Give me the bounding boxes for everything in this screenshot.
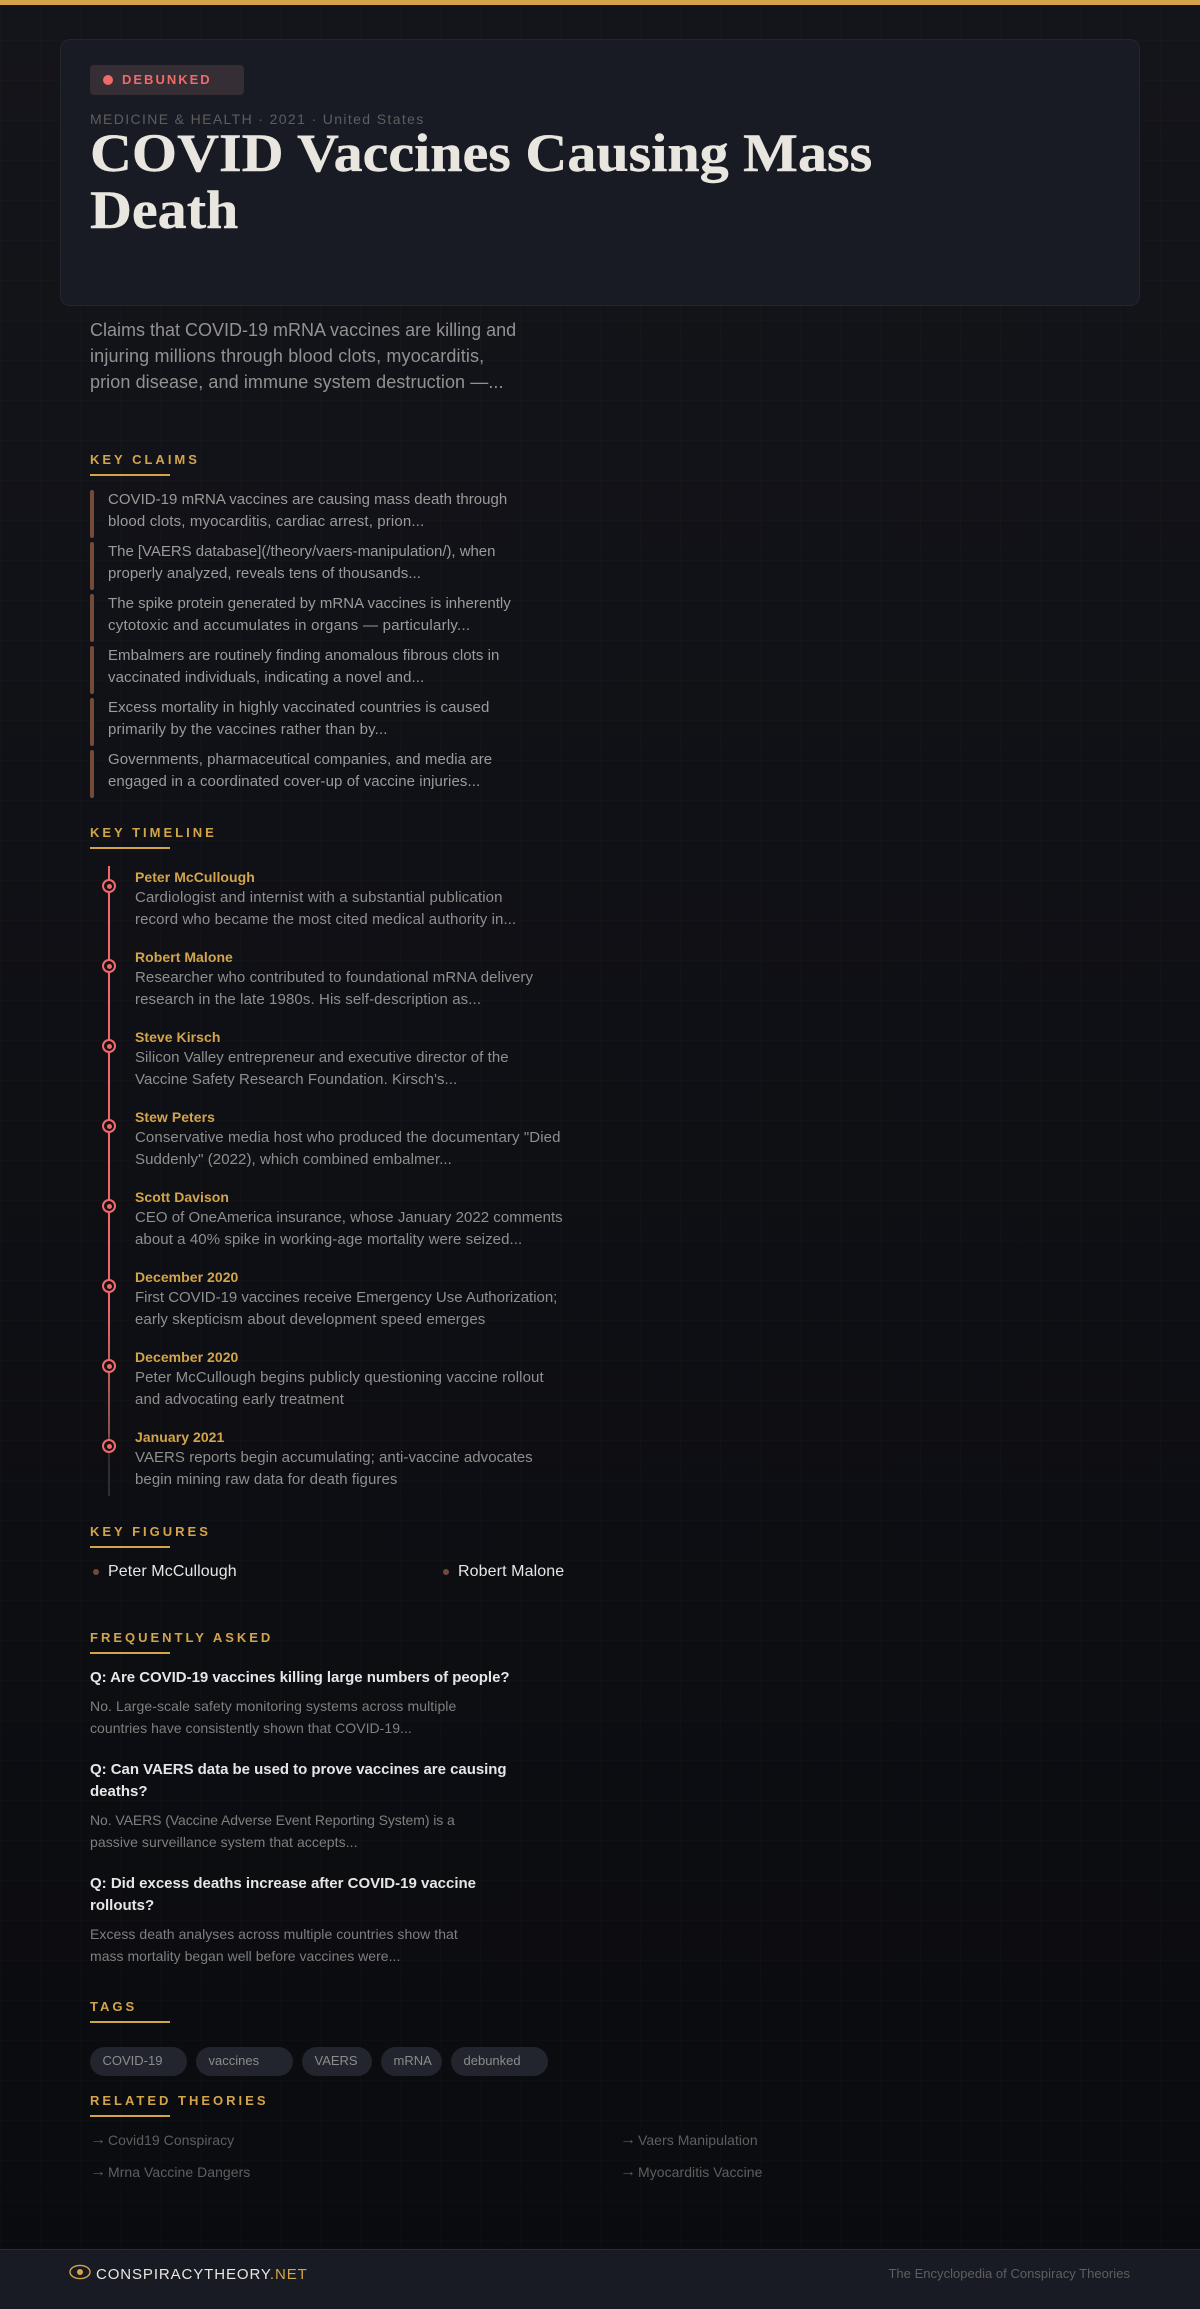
category meta line: MEDICINE & HEALTH · 2021 · United States: [90, 111, 425, 127]
panel: key figures: [90, 1524, 564, 1580]
icon: eye: [69, 2264, 91, 2280]
claim 5: [90, 698, 489, 746]
heading: key figures: KEY FIGURES: [90, 1524, 211, 1539]
tag list: [90, 2047, 548, 2076]
event: Steve Kirsch: Steve Kirsch: [135, 1029, 220, 1045]
logo: [69, 2264, 308, 2283]
link: Vaers Manipulation: →: [620, 2131, 636, 2147]
faq 2: passive surveillance system that accepts...: [90, 1834, 358, 1850]
event: December 2020 EUA: December 2020: [135, 1269, 238, 1285]
summary text: Claims that COVID-19 mRNA vaccines are killing and: [90, 320, 516, 340]
timeline spine: [108, 866, 110, 1496]
event: Peter McCullough: Peter McCullough: [135, 869, 255, 885]
event: Peter McCullough: record who became the most cited medical authority in...: [135, 911, 516, 928]
event: December 2020 McCullough: and advocating early treatment: [135, 1391, 344, 1408]
panel: key claims: [90, 452, 511, 798]
panel: tags: [90, 1999, 548, 2076]
event: Robert Malone: Researcher who contributed to foundational mRNA delivery: [135, 969, 533, 986]
tag: vaccines: [196, 2047, 293, 2076]
heading: key timeline: KEY TIMELINE: [90, 825, 217, 840]
wordmark: CONSPIRACYTHEORY.NET: [96, 2266, 308, 2283]
event: Scott Davison: CEO of OneAmerica insurance, whose January 2022 comments: [135, 1209, 563, 1226]
faq 3: mass mortality began well before vaccines were...: [90, 1948, 400, 1964]
heading: key claims: KEY CLAIMS: [90, 452, 200, 467]
claim 1: blood clots, myocarditis, cardiac arrest, prion...: [108, 513, 424, 530]
faq 3: Excess death analyses across multiple countries show that: [90, 1926, 458, 1942]
event: Steve Kirsch: [102, 1029, 509, 1088]
event: Stew Peters: Stew Peters: [135, 1109, 215, 1125]
faq 1: No. Large-scale safety monitoring systems across multiple: [90, 1698, 456, 1714]
event: Robert Malone: Robert Malone: [135, 949, 233, 965]
event: December 2020 EUA: [102, 1269, 557, 1328]
event: Robert Malone: research in the late 1980s. His self-description as...: [135, 991, 481, 1008]
link: Mrna Vaccine Dangers: Mrna Vaccine Dangers: [108, 2164, 250, 2180]
event: Scott Davison: [102, 1189, 563, 1248]
event: Stew Peters: [102, 1109, 561, 1168]
claim 6: Governments, pharmaceutical companies, and media are: [108, 751, 492, 768]
tagline: The Encyclopedia of Conspiracy Theories: [888, 2266, 1130, 2281]
link: Mrna Vaccine Dangers: →: [90, 2163, 106, 2179]
claim 3: The spike protein generated by mRNA vaccines is inherently: [108, 595, 511, 612]
faq 3: Q: Did excess deaths increase after COVID-19 vaccine: [90, 1875, 476, 1892]
tag: VAERS: [302, 2047, 372, 2076]
panel: hero header: [60, 39, 1140, 306]
tag: VAERS: VAERS: [314, 2053, 358, 2068]
faq 2: Q: Can VAERS data be used to prove vaccines are causing: [90, 1761, 507, 1778]
faq 1: Q: Are COVID-19 vaccines killing large numbers of people?: [90, 1669, 510, 1686]
link: Myocarditis Vaccine: →: [620, 2163, 636, 2179]
figure: Peter McCullough: Peter McCullough: [108, 1563, 237, 1580]
claim 4: Embalmers are routinely finding anomalous fibrous clots in: [108, 647, 499, 664]
event: January 2021: begin mining raw data for death figures: [135, 1471, 397, 1488]
event: Stew Peters: Conservative media host who produced the documentary "Died: [135, 1129, 561, 1146]
event: Scott Davison: Scott Davison: [135, 1189, 229, 1205]
event: January 2021: January 2021: [135, 1429, 224, 1445]
faq 3: [90, 1875, 476, 1964]
event: Steve Kirsch: Silicon Valley entrepreneur and executive director of the: [135, 1049, 509, 1066]
heading: frequently asked: FREQUENTLY ASKED: [90, 1630, 273, 1645]
icon: status dot: [103, 75, 113, 85]
claim 1: [90, 490, 507, 538]
claim 1: COVID-19 mRNA vaccines are causing mass death through: [108, 491, 507, 508]
status badge: debunked: [90, 65, 244, 95]
heading: tags: TAGS: [90, 1999, 137, 2014]
claim 3: [90, 594, 511, 642]
title: COVID Vaccines Causing Mass Death: [90, 123, 872, 240]
figure: Robert Malone: Robert Malone: [458, 1563, 564, 1580]
tag: COVID-19: [90, 2047, 187, 2076]
faq 2: No. VAERS (Vaccine Adverse Event Reporting System) is a: [90, 1812, 455, 1828]
event: Scott Davison: about a 40% spike in working-age mortality were seized...: [135, 1231, 522, 1248]
summary text: prion disease, and immune system destruction —...: [90, 372, 504, 392]
event: December 2020 McCullough: December 2020: [135, 1349, 238, 1365]
link: Vaers Manipulation: Vaers Manipulation: [638, 2132, 758, 2148]
footer: [0, 2249, 1200, 2309]
event: Robert Malone: [102, 949, 533, 1008]
badge label: DEBUNKED: [122, 72, 212, 87]
event: December 2020 EUA: early skepticism about development speed emerges: [135, 1311, 485, 1328]
event: December 2020 McCullough: [102, 1349, 544, 1408]
faq 2: deaths?: [90, 1783, 148, 1800]
claim 5: Excess mortality in highly vaccinated countries is caused: [108, 699, 489, 716]
tag: debunked: [451, 2047, 548, 2076]
claim 4: [90, 646, 499, 694]
claim 2: [90, 542, 495, 590]
event: Peter McCullough: [102, 869, 516, 928]
faq 1: [90, 1669, 510, 1736]
summary text: [90, 320, 516, 392]
faq 3: rollouts?: [90, 1897, 154, 1914]
heading: related theories: RELATED THEORIES: [90, 2093, 268, 2108]
event: Peter McCullough: Cardiologist and internist with a substantial publication: [135, 889, 503, 906]
claim 2: properly analyzed, reveals tens of thousands...: [108, 565, 421, 582]
tag: vaccines: vaccines: [208, 2053, 259, 2068]
panel: related theories: [90, 2093, 762, 2180]
faq 2: [90, 1761, 507, 1850]
event: December 2020 McCullough: Peter McCullough begins publicly questioning vaccine rollout: [135, 1369, 544, 1386]
event: Stew Peters: Suddenly" (2022), which combined embalmer...: [135, 1151, 452, 1168]
claim 4: vaccinated individuals, indicating a novel and...: [108, 669, 424, 686]
link: Covid19 Conspiracy: →: [90, 2131, 106, 2147]
tag: debunked: debunked: [464, 2053, 521, 2068]
claim 6: engaged in a coordinated cover-up of vaccine injuries...: [108, 773, 480, 790]
claim 2: The [VAERS database](/theory/vaers-manipulation/), when: [108, 543, 495, 560]
event: January 2021: [102, 1429, 533, 1488]
faq 1: countries have consistently shown that COVID-19...: [90, 1720, 412, 1736]
link: Covid19 Conspiracy: Covid19 Conspiracy: [108, 2132, 234, 2148]
tag: COVID-19: COVID-19: [102, 2053, 162, 2068]
link: Myocarditis Vaccine: Myocarditis Vaccine: [638, 2164, 762, 2180]
panel: frequently asked: [90, 1630, 510, 1964]
tag: mRNA: [381, 2047, 442, 2076]
tag: mRNA: mRNA: [394, 2053, 432, 2068]
summary text: injuring millions through blood clots, myocarditis,: [90, 346, 484, 366]
event: January 2021: VAERS reports begin accumulating; anti-vaccine advocates: [135, 1449, 533, 1466]
claim 3: cytotoxic and accumulates in organs — particularly...: [108, 617, 470, 634]
event: Steve Kirsch: Vaccine Safety Research Foundation. Kirsch's...: [135, 1071, 457, 1088]
panel: key timeline: [90, 825, 563, 1496]
event: December 2020 EUA: First COVID-19 vaccines receive Emergency Use Authorization;: [135, 1289, 557, 1306]
claim 5: primarily by the vaccines rather than by...: [108, 721, 388, 738]
claim 6: [90, 750, 492, 798]
